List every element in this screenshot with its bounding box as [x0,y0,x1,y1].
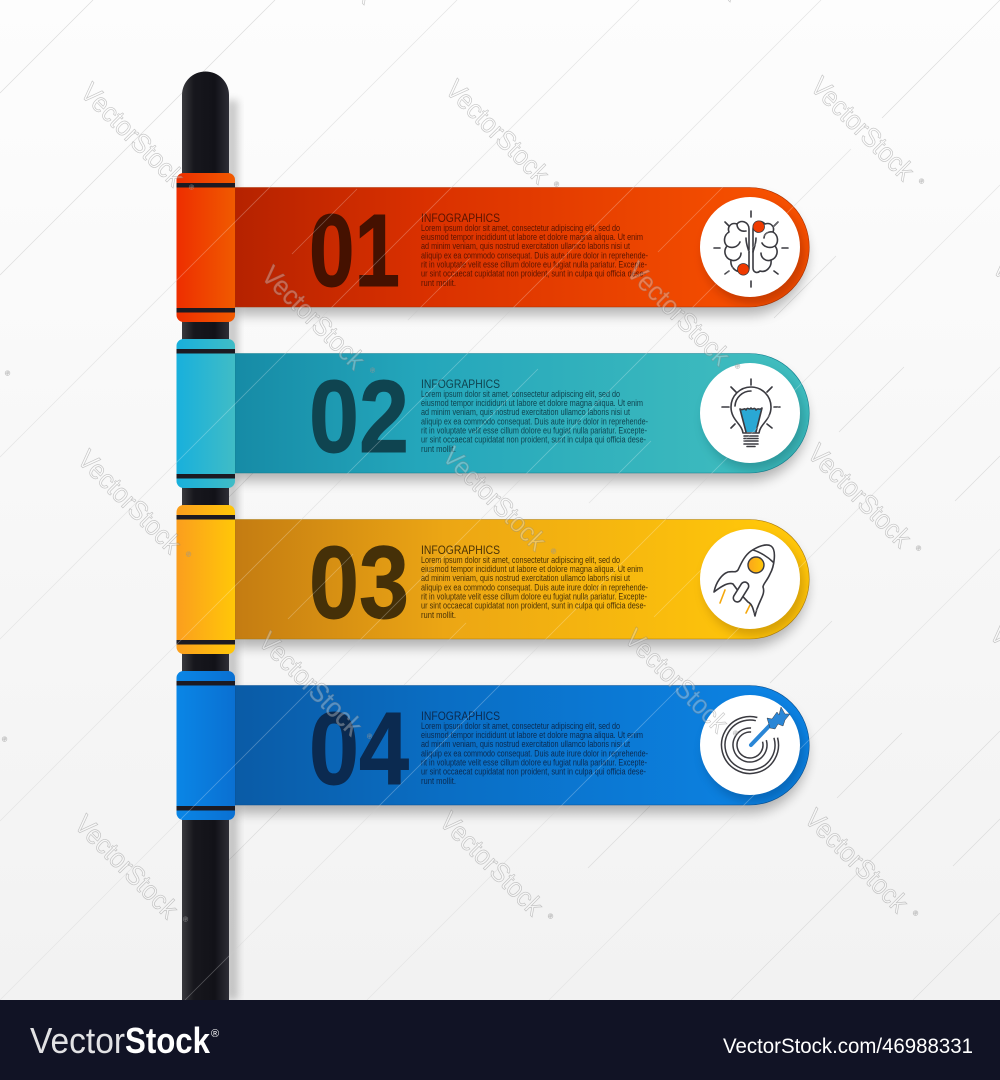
text block 02: ur sint occaecat cupidatat non proident, sunt in culpa qui officia dese- [421,434,646,444]
banner shadow [235,528,807,647]
watermarks: VectorStock [619,623,734,739]
watermarks: VectorStock [621,256,736,372]
panel: step 01 [176,173,809,322]
text block 02: ad minim veniam, quis nostrud exercitation ullamco laboris nisi ut [421,407,630,417]
text block 01: ur sint occaecat cupidatat non proident, sunt in culpa qui officia dese- [421,268,646,278]
panel: step 04 [176,671,809,820]
watermarks: ® [552,180,561,190]
collar [176,339,235,488]
text block 01: eiusmod tempor incididunt ut labore et dolore magna aliqua. Ut enim [421,232,643,242]
icon: brain [700,197,800,297]
banner [235,520,809,639]
banner [235,354,809,473]
panel: step 03 [176,505,809,654]
text block 03: runt mollit. [421,610,456,620]
watermarks: ® [911,909,920,919]
watermarks: VectorStock [805,71,920,187]
banner shadow [235,694,807,813]
banner shadow [235,362,807,481]
text block 02: Lorem ipsum dolor sit amet, consectetur adipiscing elit, sed do [421,389,620,399]
watermarks: VectorStock [434,806,549,922]
text block 04 [421,709,648,786]
text block 01: aliquip ex ea commodo consequat. Duis aute irure dolor in reprehende- [421,250,648,260]
watermarks: ® [546,912,555,922]
text block 02: rit in voluptate velit esse cillum dolore eu fugiat nulla pariatur. Excepte- [421,426,647,436]
watermarks: ® [3,369,12,379]
watermarks: ® [365,732,374,742]
icon: target [700,695,800,795]
text block 03: Lorem ipsum dolor sit amet, consectetur adipiscing elit, sed do [421,555,620,565]
watermarks: VectorStock [437,441,552,557]
icon: light bulb [700,363,800,463]
text block 04: ad minim veniam, quis nostrud exercitation ullamco laboris nisi ut [421,739,630,749]
footer logo [30,1020,219,1061]
text block 01: Lorem ipsum dolor sit amet, consectetur adipiscing elit, sed do [421,223,620,233]
watermarks: ® [733,362,742,372]
watermarks: VectorStock [256,260,371,376]
text block 03: rit in voluptate velit esse cillum dolore eu fugiat nulla pariatur. Excepte- [421,592,647,602]
text block 04: aliquip ex ea commodo consequat. Duis aute irure dolor in reprehende- [421,748,648,758]
text block 03: eiusmod tempor incididunt ut labore et dolore magna aliqua. Ut enim [421,564,643,574]
icon shadow [704,370,804,470]
text block 02: aliquip ex ea commodo consequat. Duis aute irure dolor in reprehende- [421,416,648,426]
watermarks: ® [549,547,558,557]
text block 04: ur sint occaecat cupidatat non proident, sunt in culpa qui officia dese- [421,766,646,776]
watermarks: VectorStock [75,77,190,193]
collar [176,173,235,322]
icon: rocket [700,529,800,629]
footer image id: VectorStock.com/46988331 [723,1035,973,1058]
text block 04: Lorem ipsum dolor sit amet, consectetur adipiscing elit, sed do [421,721,620,731]
watermarks: ® [914,544,923,554]
text block 04: INFOGRAPHICS [421,709,500,723]
footer bar [0,1000,1000,1080]
icon shadow [704,702,804,802]
text block 03: ad minim veniam, quis nostrud exercitation ullamco laboris nisi ut [421,573,630,583]
watermarks: VectorStock [72,444,187,560]
watermarks: ® [181,915,190,925]
pole [182,71,229,1000]
watermarks: ® [187,183,196,193]
text block 01: rit in voluptate velit esse cillum dolore eu fugiat nulla pariatur. Excepte- [421,260,647,270]
watermarks: VectorStock [253,626,368,742]
icon shadow [704,536,804,636]
text block 01 [421,211,648,288]
number 04: 04 [309,691,409,806]
text block 03: INFOGRAPHICS [421,543,500,557]
collar [176,505,235,654]
text block 02: runt mollit. [421,444,456,454]
pole shadow [226,100,238,1000]
footer logo: Vector [30,1020,125,1061]
text block 01: runt mollit. [421,278,456,288]
number 02: 02 [309,359,409,474]
watermarks: ® [917,177,926,187]
text block 04: rit in voluptate velit esse cillum dolore eu fugiat nulla pariatur. Excepte- [421,758,647,768]
footer logo: ® [211,1028,219,1040]
watermarks: ® [731,729,740,739]
footer logo: Stock [125,1020,211,1061]
text block 01: INFOGRAPHICS [421,211,500,225]
icon shadow [704,204,804,304]
collar [176,671,235,820]
number 01: 01 [309,193,400,308]
watermarks: VectorStock [69,809,184,925]
banner shadow [235,196,807,315]
text block 03 [421,543,648,620]
banner [235,188,809,307]
text block 04: eiusmod tempor incididunt ut labore et dolore magna aliqua. Ut enim [421,730,643,740]
watermarks: ® [368,366,377,376]
panel: step 02 [176,339,809,488]
text block 02 [421,377,648,454]
text block 01: ad minim veniam, quis nostrud exercitation ullamco laboris nisi ut [421,241,630,251]
banner [235,686,809,805]
text block 04: runt mollit. [421,776,456,786]
watermarks: VectorStock [799,803,914,919]
text block 02: eiusmod tempor incididunt ut labore et dolore magna aliqua. Ut enim [421,398,643,408]
text block 03: aliquip ex ea commodo consequat. Duis aute irure dolor in reprehende- [421,582,648,592]
number 03: 03 [309,525,409,640]
watermarks: ® [184,550,193,560]
text block 03: ur sint occaecat cupidatat non proident, sunt in culpa qui officia dese- [421,600,646,610]
watermarks: VectorStock [802,438,917,554]
text block 02: INFOGRAPHICS [421,377,500,391]
watermarks: VectorStock [440,74,555,190]
